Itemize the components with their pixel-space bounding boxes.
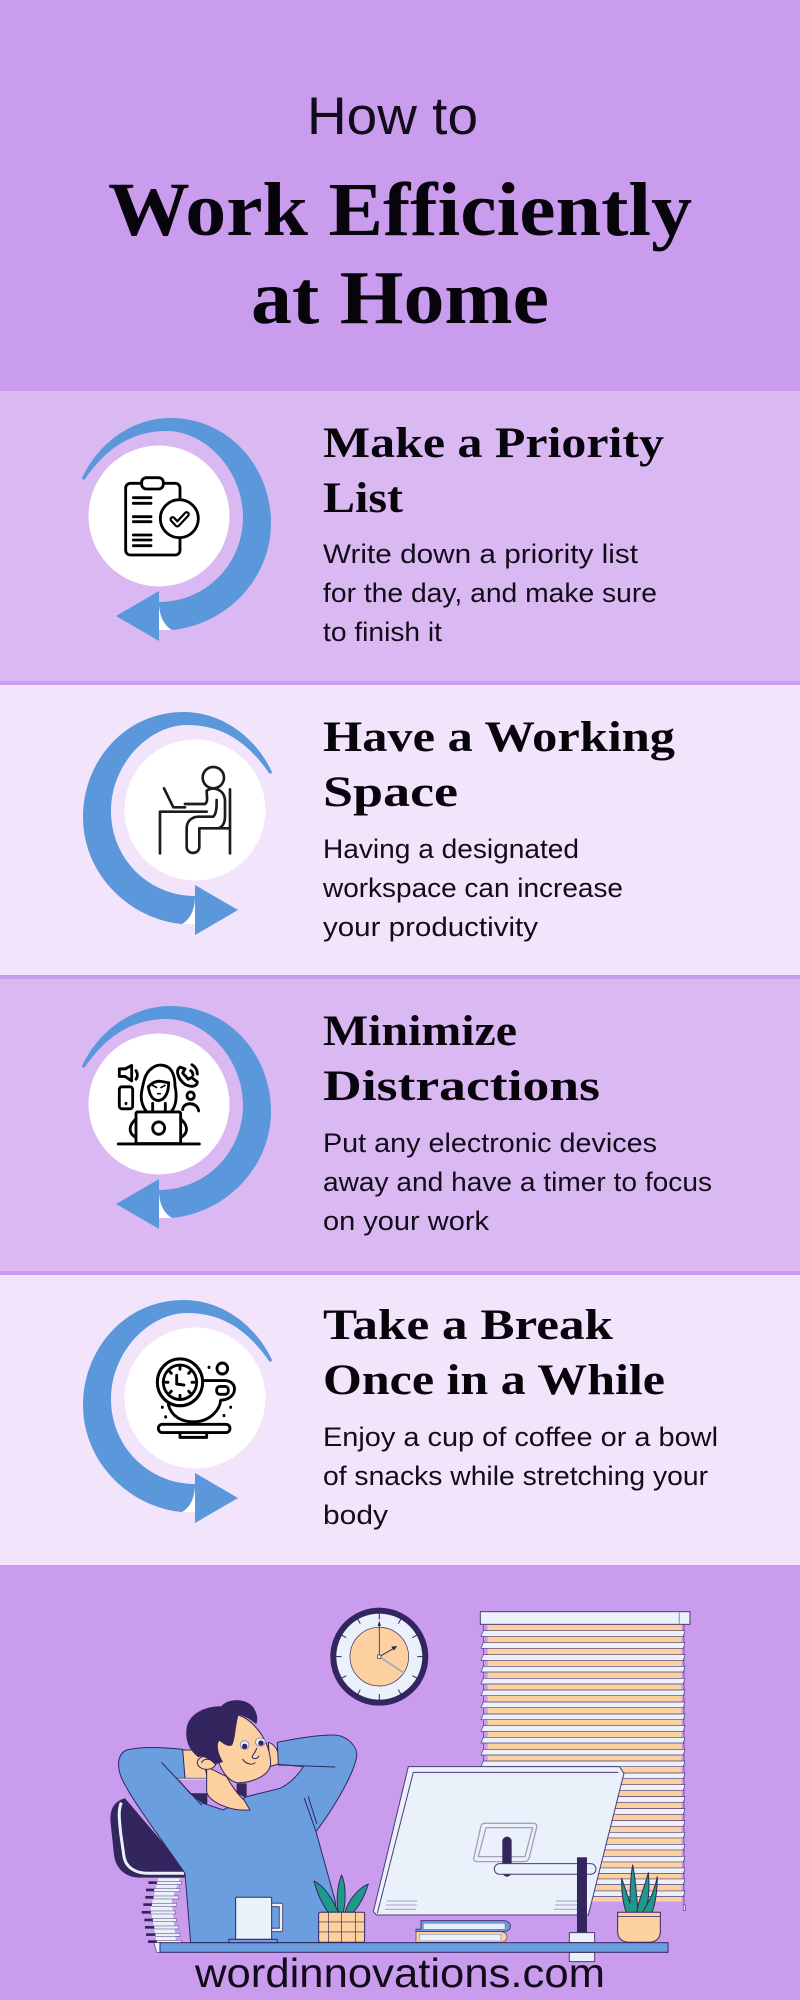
illustration: man relaxing at desk [110,1611,690,1962]
title: at Home: at Home [251,256,549,340]
coffee mug [229,1897,281,1943]
heading: Space [323,769,458,816]
body text [323,539,657,647]
body text: Put any electronic devices [323,1128,657,1158]
title: Work Efficiently: Work Efficiently [108,168,692,252]
icon: circular arrow with coffee cup and clock [83,1300,272,1523]
heading: Once in a While [323,1357,665,1404]
body text: Write down a priority list [323,539,639,569]
heading [323,1302,665,1404]
icon: circular arrow with distracted worker [82,1006,271,1229]
heading: Make a Priority [323,420,665,467]
footer website: wordinnovations.com [194,1950,605,1996]
body text: for the day, and make sure [323,578,657,608]
heading: List [323,475,404,522]
icon: circular arrow with person at desk [83,712,272,935]
body text [323,1128,712,1236]
wall clock [333,1611,425,1703]
body text [323,1422,718,1530]
panel: minimize distractions [0,979,800,1271]
panel: make a priority list [0,391,800,681]
body text: Having a designated [323,834,579,864]
heading: Minimize [323,1008,517,1055]
body text: workspace can increase [322,873,623,903]
panel: have a working space [0,685,800,975]
monitor on arm [373,1767,624,1962]
heading: Take a Break [323,1302,613,1349]
desk [160,1943,668,1952]
heading [323,1008,600,1110]
body text: to finish it [323,617,443,647]
heading: Distractions [323,1063,600,1110]
heading [323,420,665,522]
icon: circular arrow with clipboard [82,418,271,641]
window blinds [480,1612,690,1911]
body text: on your work [323,1206,490,1236]
panel: take a break [0,1275,800,1565]
heading [323,714,676,816]
heading: Have a Working [323,714,676,761]
body text: body [323,1500,389,1530]
title: How to: How to [307,87,478,146]
body text [322,834,623,942]
body text: Enjoy a cup of coffee or a bowl [323,1422,718,1452]
man [119,1701,357,1943]
body text: away and have a timer to focus [323,1167,712,1197]
potted plant right [618,1865,660,1942]
potted plant left [314,1875,368,1942]
chair [110,1798,185,1878]
title block [108,87,692,340]
stack of papers [142,1878,181,1952]
body text: your productivity [323,912,539,942]
body text: of snacks while stretching your [323,1461,708,1491]
